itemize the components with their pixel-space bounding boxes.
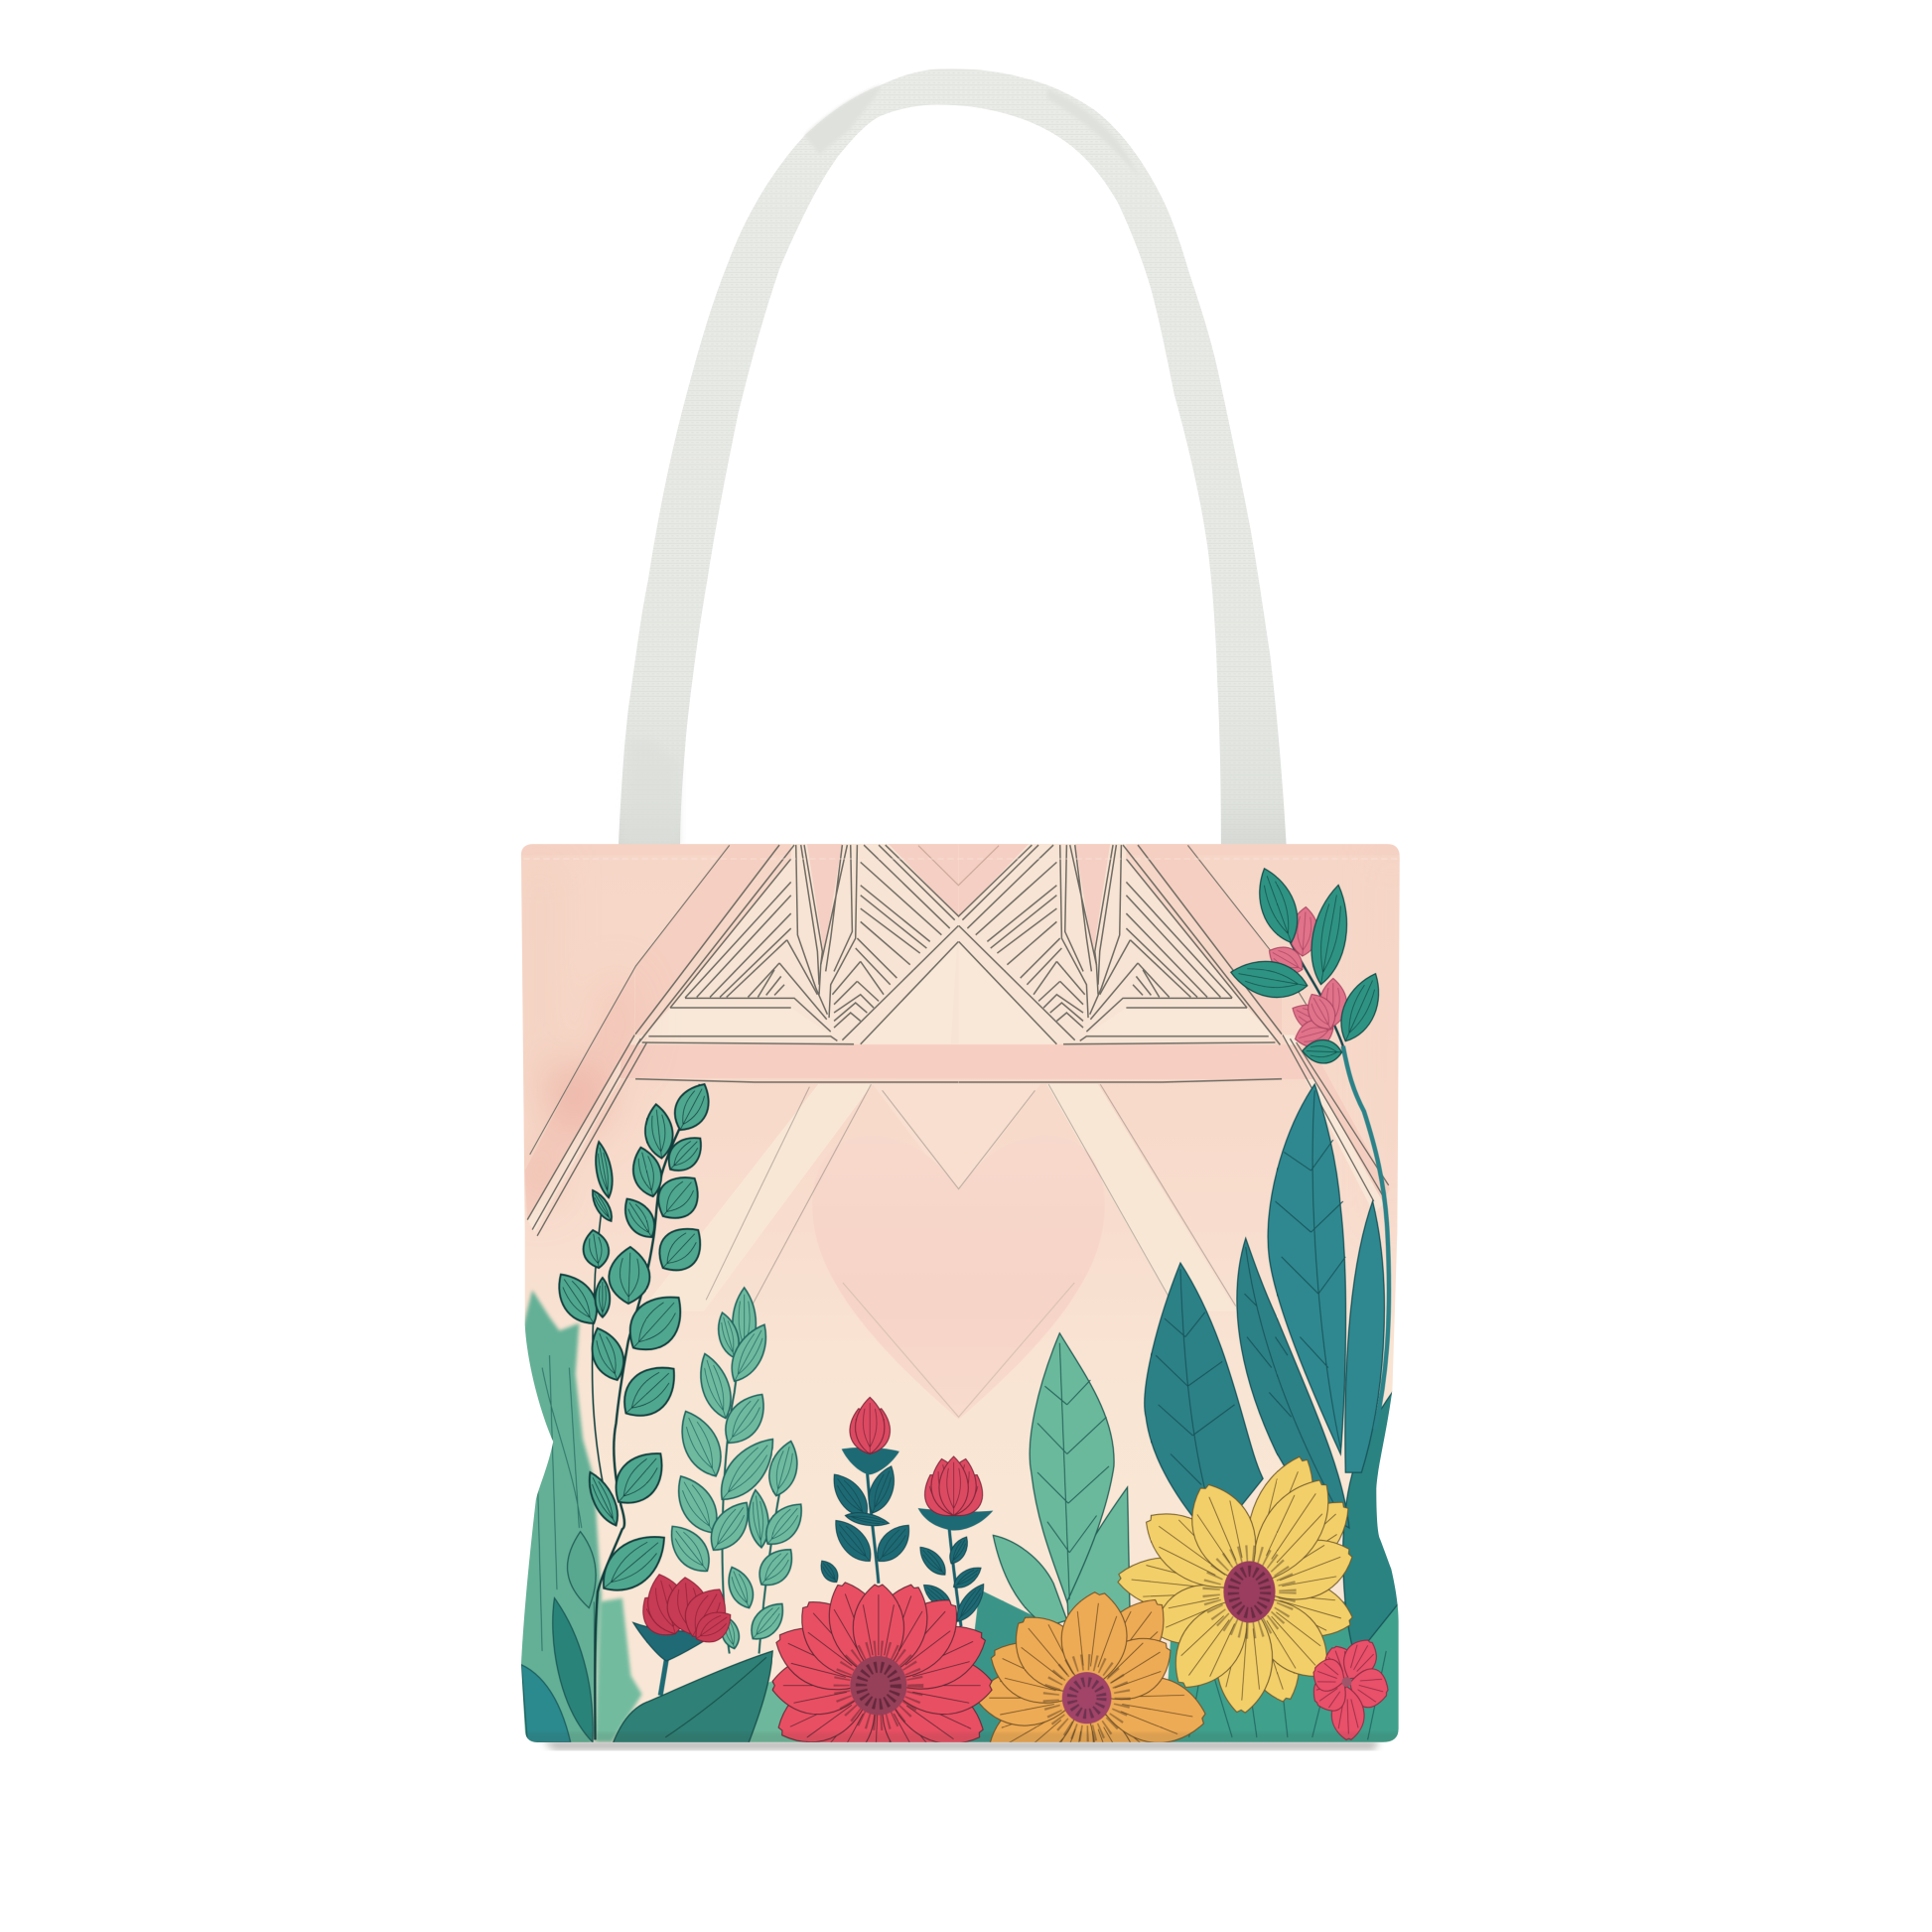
dark leaf at lower left xyxy=(613,1651,772,1744)
geometric pink and cream panels xyxy=(525,844,1390,1265)
bag body xyxy=(520,844,1400,1742)
sprig: mint fern xyxy=(671,1287,802,1654)
bottom fold shading xyxy=(526,1731,1398,1742)
handle xyxy=(619,69,1287,845)
flower: yellow daisy xyxy=(1116,1448,1363,1715)
flower: red tulip plant 2 xyxy=(914,1455,993,1626)
flower: deep red bloom xyxy=(632,1570,739,1696)
flower: red tulip plant 1 xyxy=(820,1396,909,1585)
big mint leaves xyxy=(993,1333,1130,1639)
pencil lines: origami mountains xyxy=(527,845,1389,1417)
soft fabric folds xyxy=(524,998,640,1203)
ground shadow xyxy=(542,1741,1380,1749)
bottom foliage xyxy=(743,1589,1405,1742)
tote bag illustration xyxy=(505,69,1417,1811)
fabric base xyxy=(505,838,1417,1756)
big teal leaves xyxy=(1145,1084,1400,1657)
flower: orange daisy xyxy=(979,1591,1206,1742)
sprig: tall left vine xyxy=(558,1082,710,1740)
flower: red daisy xyxy=(771,1582,993,1742)
top hem stitching xyxy=(523,858,1397,860)
right stem xyxy=(1343,1046,1389,1430)
lower-left mint foliage xyxy=(511,1290,642,1749)
upper right sprig xyxy=(1228,863,1390,1064)
flower: small pink blossom xyxy=(1312,1639,1389,1741)
heart xyxy=(812,1135,1105,1420)
